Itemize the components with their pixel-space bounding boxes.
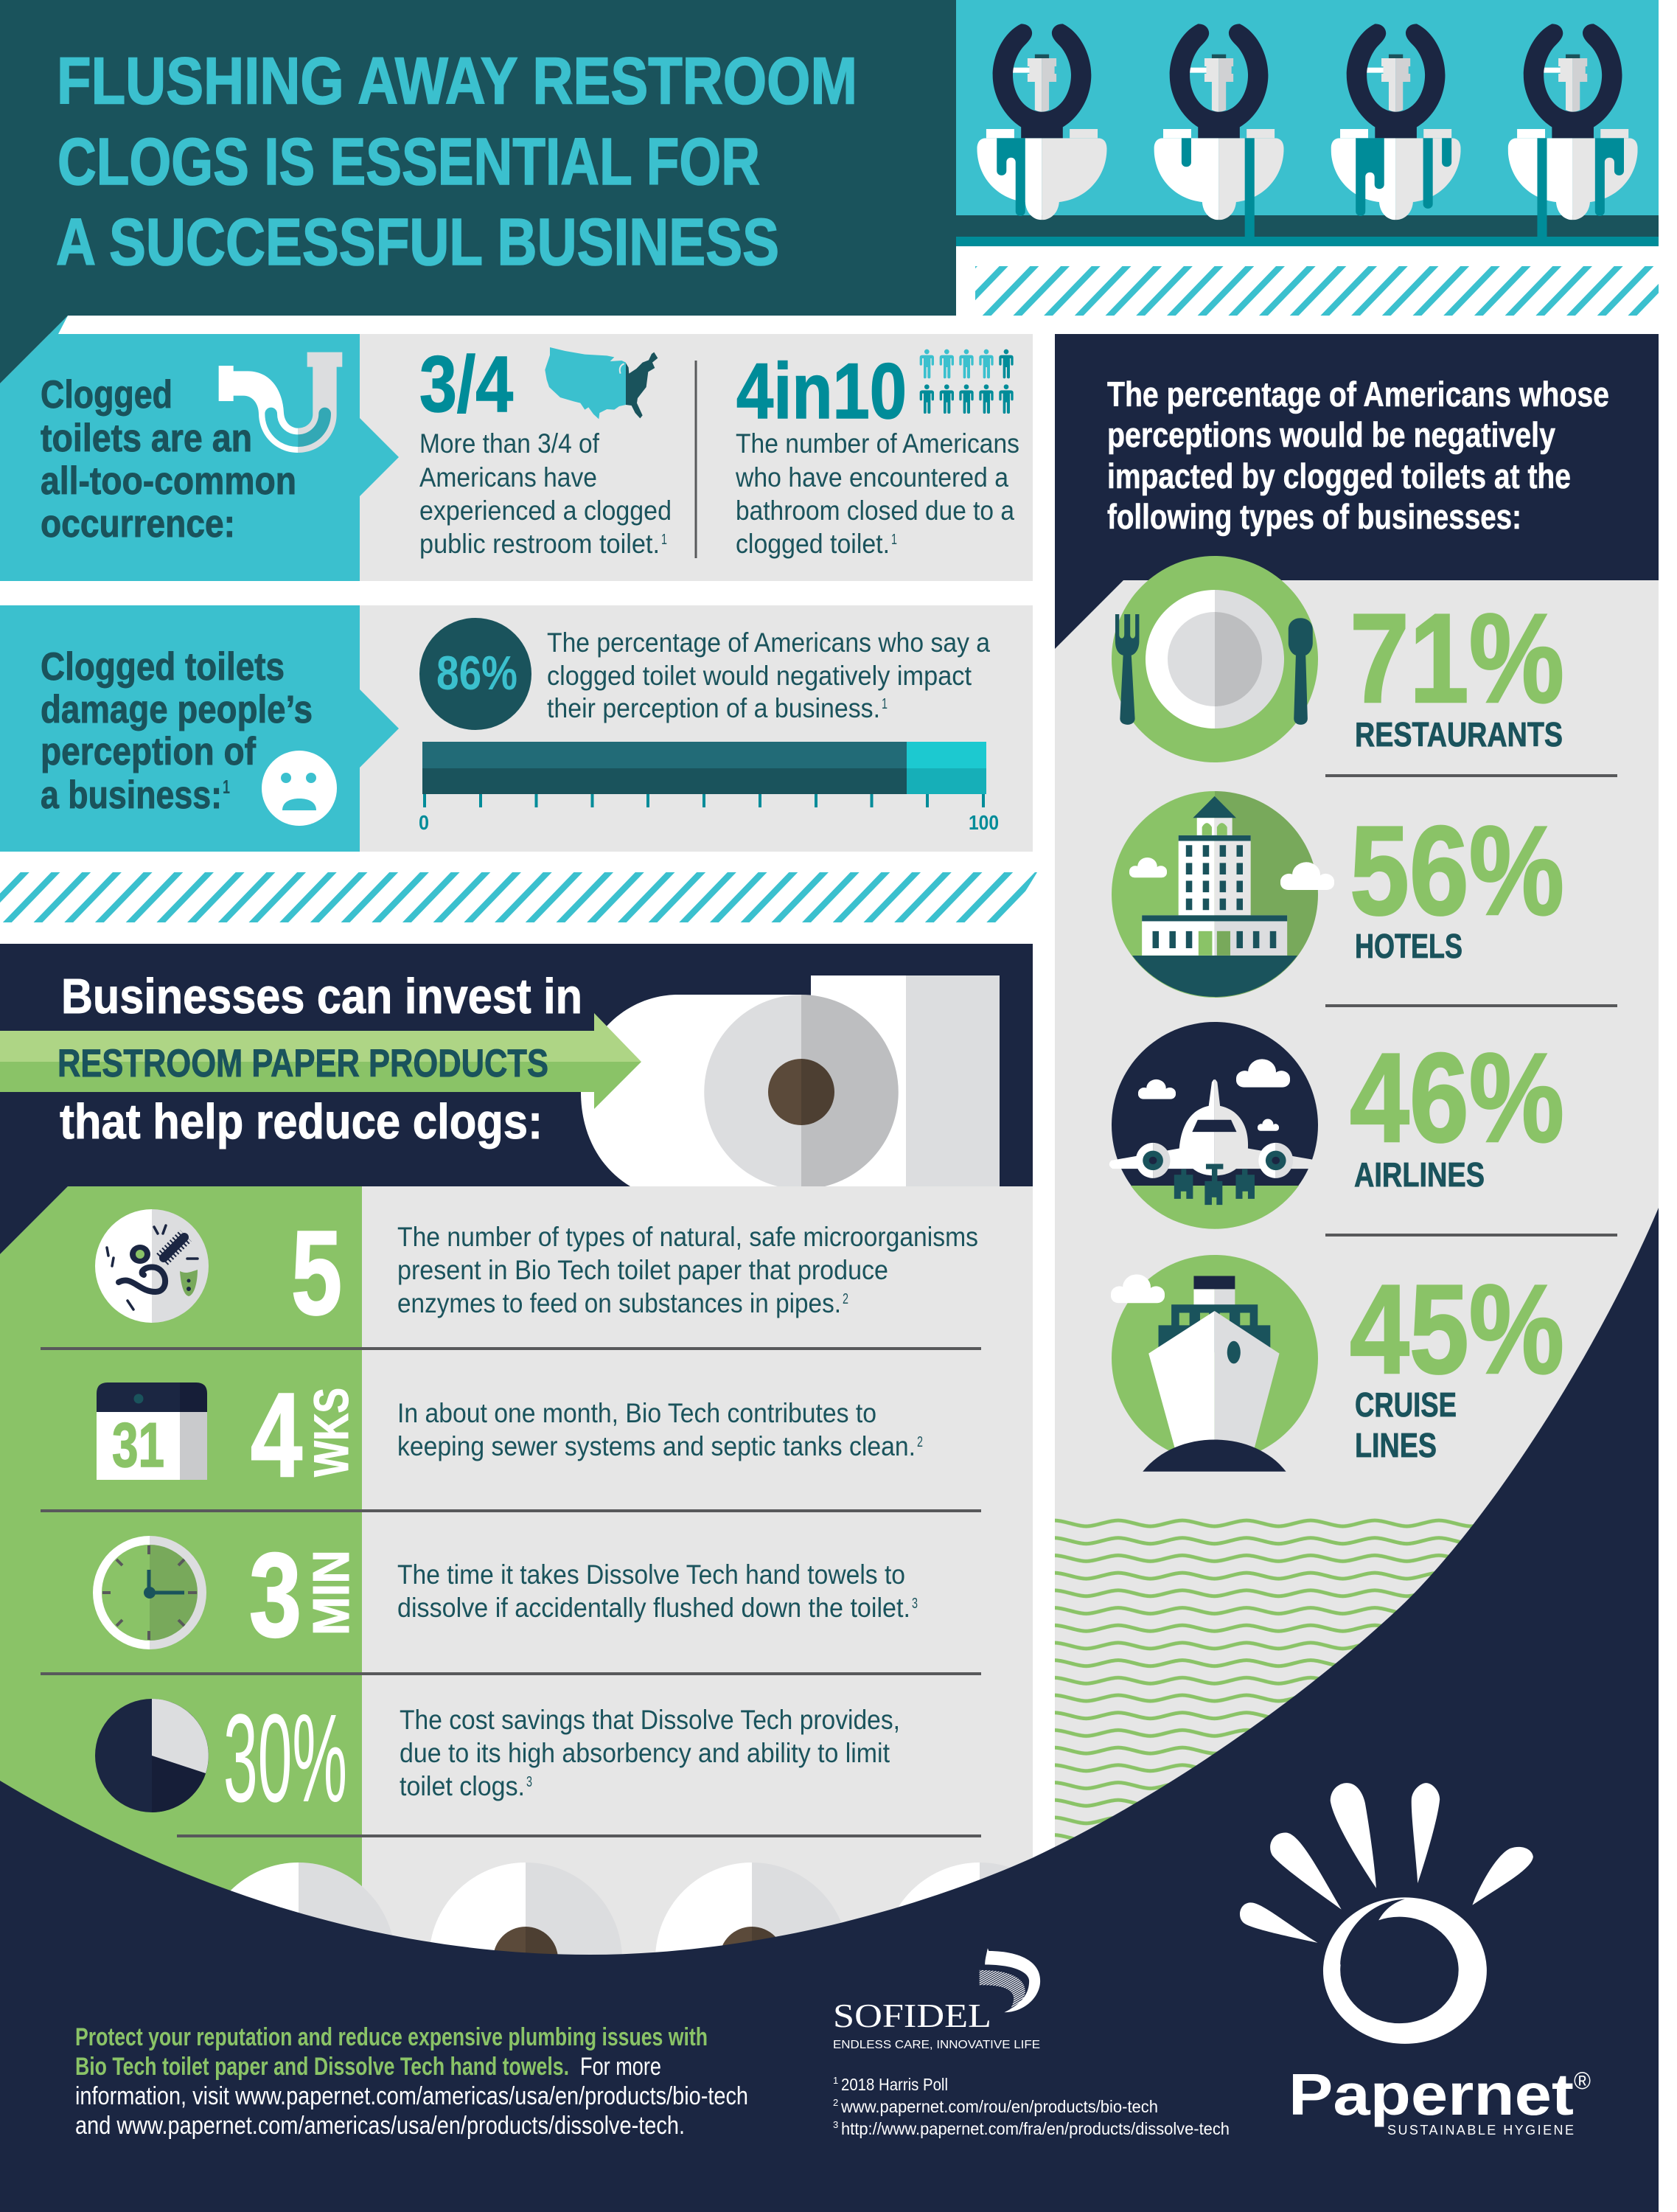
title: A SUCCESSFUL BUSINESS bbox=[56, 206, 779, 279]
text: 4 in 10 Americans: bathroom closed due to a bbox=[736, 495, 1014, 526]
text: one month bbox=[397, 1398, 923, 1461]
text: 4 in 10 Americans: 1 bbox=[891, 532, 897, 548]
text: perception percent: 1 bbox=[882, 696, 888, 712]
stat: 86 percent: 86% bbox=[436, 646, 517, 700]
title bbox=[56, 44, 857, 279]
heading line 2: RESTROOM PAPER PRODUCTS bbox=[57, 1042, 548, 1085]
heading: perceptions: impacted by clogged toilets at the bbox=[1107, 456, 1571, 495]
logo: Papernet: Papernet bbox=[1289, 2062, 1574, 2127]
heading line 1: Businesses can invest in bbox=[61, 969, 582, 1024]
icon: restaurant plate bbox=[1112, 556, 1318, 762]
stat: hotels 56 percent: 56% bbox=[1350, 800, 1564, 942]
heading: damage perception: perception of bbox=[41, 730, 256, 773]
heading: perceptions: following types of businesses: bbox=[1107, 497, 1521, 536]
text: perception percent: their perception of a business. bbox=[547, 693, 880, 723]
text: 3/4 of Americans: More than 3/4 of bbox=[419, 428, 600, 459]
bar chart: 86 of 100: 0 bbox=[419, 811, 429, 834]
call to action text: and www.papernet.com/americas/usa/en/products/dissolve-tech. bbox=[75, 2112, 685, 2140]
icon: pipe bbox=[219, 352, 342, 453]
call to action text: Protect your reputation and reduce expensive plumbing issues with bbox=[75, 2023, 708, 2051]
heading: all-too-common: occurrence: bbox=[41, 502, 235, 546]
icon: hotel bbox=[1112, 791, 1334, 998]
text: dissolve time: 3 bbox=[912, 1596, 918, 1612]
logo: Papernet: SUSTAINABLE HYGIENE bbox=[1387, 2123, 1574, 2138]
text: 3/4 of Americans: 1 bbox=[661, 532, 667, 548]
icon: pie chart bbox=[95, 1699, 209, 1812]
stat: 4 weeks: 4 bbox=[251, 1368, 302, 1502]
stat: 3 minutes: 3 bbox=[249, 1528, 301, 1662]
heading: all-too-common: Clogged bbox=[41, 373, 172, 417]
stat: cruise lines 45 percent: 45% bbox=[1350, 1259, 1564, 1400]
text: microorganisms: The number of types of natural, safe microorganisms bbox=[397, 1222, 978, 1252]
logo: Papernet: ® bbox=[1574, 2067, 1591, 2094]
text: cost savings: due to its high absorbency and ability to limit bbox=[400, 1738, 890, 1768]
icon: clock bbox=[93, 1536, 206, 1649]
heading: perceptions bbox=[1107, 375, 1609, 536]
text: microorganisms: enzymes to feed on substances in pipes. bbox=[397, 1288, 841, 1318]
text: cost savings: The cost savings that Dissolve Tech provides, bbox=[400, 1705, 900, 1735]
text: one month: In about one month, Bio Tech contributes to bbox=[397, 1398, 876, 1428]
panel: businesses perception bbox=[1055, 334, 1659, 1907]
text: microorganisms bbox=[397, 1222, 978, 1318]
stat: cruise lines 45 percent: LINES bbox=[1355, 1426, 1437, 1464]
panel: perception of a business bbox=[0, 605, 1033, 852]
panel: product benefits bbox=[0, 1186, 1076, 2056]
heading: damage perception bbox=[41, 645, 313, 817]
text: perception percent: The percentage of Americans who say a bbox=[547, 627, 990, 658]
text: dissolve time bbox=[397, 1559, 918, 1623]
footnotes: http://www.papernet.com/fra/en/products/dissolve-tech bbox=[841, 2119, 1230, 2138]
icon: sad face bbox=[262, 751, 337, 826]
text: perception percent: clogged toilet would negatively impact bbox=[547, 661, 972, 691]
footnotes: www.papernet.com/rou/en/products/bio-tech bbox=[840, 2097, 1158, 2116]
panel: clogged toilets occurrence bbox=[0, 316, 1033, 581]
text: microorganisms: 2 bbox=[843, 1291, 848, 1307]
heading: all-too-common bbox=[41, 373, 296, 546]
call to action text: For more bbox=[580, 2053, 661, 2081]
icon: toilet 2 bbox=[1154, 24, 1284, 237]
icon: microorganisms bbox=[95, 1209, 209, 1323]
footnotes bbox=[833, 2075, 1230, 2138]
stat: 4 weeks bbox=[251, 1368, 358, 1502]
stat: 4 weeks: WKS bbox=[304, 1388, 358, 1477]
text: cost savings: toilet clogs. bbox=[400, 1771, 525, 1801]
icon: people bbox=[920, 349, 1014, 414]
heading line 3: that help reduce clogs: bbox=[60, 1094, 543, 1150]
stat: cruise lines 45 percent bbox=[1350, 1259, 1564, 1464]
logo: Sofidel bbox=[833, 1948, 1040, 2051]
icon: airplane bbox=[1109, 1022, 1320, 1229]
text: 3/4 of Americans: public restroom toilet. bbox=[419, 529, 660, 559]
logo: Sofidel: SOFIDEL bbox=[833, 1997, 991, 2034]
text: dissolve time: dissolve if accidentally flushed down the toilet. bbox=[397, 1593, 910, 1623]
icon: calendar: 31 bbox=[112, 1411, 164, 1481]
call to action text: Bio Tech toilet paper and Dissolve Tech hand towels. bbox=[75, 2053, 569, 2081]
heading: perceptions: perceptions would be negatively bbox=[1107, 415, 1555, 454]
text: 4 in 10 Americans: clogged toilet. bbox=[736, 529, 890, 559]
text: 4 in 10 Americans: who have encountered a bbox=[735, 462, 1008, 493]
title: FLUSHING AWAY RESTROOM bbox=[57, 44, 857, 118]
text: 3/4 of Americans bbox=[419, 428, 672, 559]
footer panel bbox=[0, 1208, 1659, 2212]
header panel bbox=[0, 0, 956, 383]
footnotes: 3 bbox=[833, 2119, 838, 2130]
stat: airlines 46 percent: AIRLINES bbox=[1354, 1155, 1485, 1194]
stat: restaurants 71 percent: 71% bbox=[1350, 588, 1564, 729]
stat: 3 minutes bbox=[249, 1528, 360, 1662]
title: CLOGS IS ESSENTIAL FOR bbox=[57, 125, 760, 199]
heading: all-too-common: all-too-common bbox=[41, 459, 296, 503]
icon: toilet 3 bbox=[1331, 24, 1461, 222]
text: cost savings bbox=[400, 1705, 900, 1801]
text: 3/4 of Americans: experienced a clogged bbox=[419, 495, 672, 526]
text: 3/4 of Americans: Americans have bbox=[419, 462, 597, 493]
stat: restaurants 71 percent: RESTAURANTS bbox=[1355, 715, 1563, 754]
text: one month: 2 bbox=[917, 1434, 923, 1450]
bar chart: 86 of 100 bbox=[419, 742, 999, 834]
icon: cruise ship bbox=[1111, 1255, 1318, 1472]
stat: hotels 56 percent: HOTELS bbox=[1355, 927, 1462, 965]
heading: damage perception: 1 bbox=[223, 776, 230, 798]
text: cost savings: 3 bbox=[526, 1774, 532, 1790]
stat: 3 minutes: MIN bbox=[302, 1550, 360, 1635]
call to action text bbox=[75, 2023, 748, 2140]
text: 4 in 10 Americans bbox=[735, 428, 1019, 559]
stat: 86 percent bbox=[419, 618, 531, 730]
icon: row of toilet paper rolls bbox=[202, 1863, 1076, 2056]
footnotes: 2018 Harris Poll bbox=[841, 2075, 948, 2094]
stat: 3/4: 3/4 bbox=[419, 339, 513, 428]
icon: toilet 1 bbox=[977, 24, 1106, 222]
text: one month: keeping sewer systems and septic tanks clean. bbox=[397, 1431, 916, 1461]
text: perception percent bbox=[547, 627, 990, 723]
heading: damage perception: a business: bbox=[41, 773, 222, 817]
heading: damage perception: Clogged toilets bbox=[41, 645, 285, 689]
panel: restroom paper products bbox=[0, 944, 1033, 1186]
text: microorganisms: present in Bio Tech toilet paper that produce bbox=[397, 1255, 888, 1285]
icon: toilet paper roll bbox=[581, 975, 1000, 1186]
heading: damage perception: damage people’s bbox=[41, 688, 313, 731]
bar chart: 86 of 100: 100 bbox=[969, 811, 999, 834]
stat: airlines 46 percent: 46% bbox=[1350, 1027, 1564, 1169]
footnotes: 2 bbox=[833, 2097, 838, 2108]
stat: cruise lines 45 percent: CRUISE bbox=[1355, 1385, 1457, 1424]
text: 4 in 10 Americans: The number of Americans bbox=[736, 428, 1019, 459]
arrow bbox=[0, 1013, 641, 1109]
logo: Sofidel: ENDLESS CARE, INNOVATIVE LIFE bbox=[833, 2039, 1040, 2051]
footnotes: 1 bbox=[833, 2075, 838, 2086]
header illustration: plungers in toilets bbox=[956, 0, 1659, 246]
stat: 5: 5 bbox=[291, 1206, 342, 1340]
panel: product benefits: 30% bbox=[223, 1688, 347, 1829]
stat: 4 in 10: 4in10 bbox=[736, 347, 907, 435]
icon: USA map bbox=[545, 347, 658, 419]
heading: all-too-common: toilets are an bbox=[41, 417, 252, 460]
text: dissolve time: The time it takes Dissolve Tech hand towels to bbox=[397, 1559, 905, 1590]
icon: calendar bbox=[97, 1382, 207, 1481]
call to action text: information, visit www.papernet.com/americas/usa/en/products/bio-tech bbox=[75, 2082, 748, 2110]
icon: toilet 4 bbox=[1508, 24, 1638, 237]
logo: Papernet bbox=[1240, 1783, 1591, 2138]
